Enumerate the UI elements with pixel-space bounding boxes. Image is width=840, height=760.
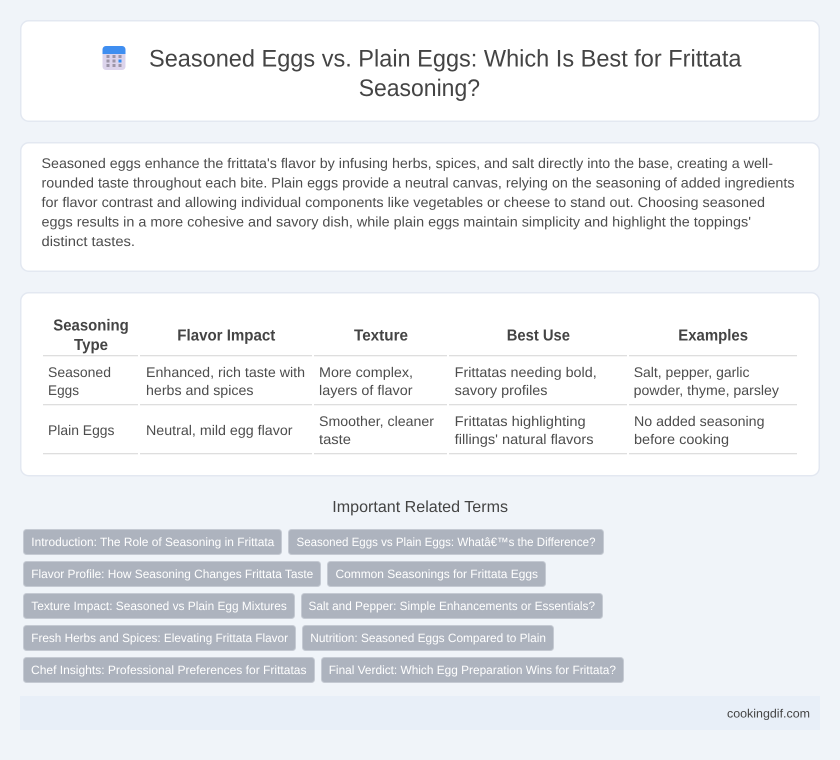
tag: texture impact: Texture Impact: Seasoned vs Plain Egg Mixtures — [31, 599, 287, 613]
tag: flavor profile — [24, 562, 320, 586]
heading: important related terms: Important Related Terms — [332, 499, 508, 516]
table row: seasoned eggs: herbs and spices — [146, 382, 254, 398]
text block: description paragraph: rounded taste throughout each bite. Plain eggs provide a neutral canvas, relying on the seasoning of added ingredients — [42, 174, 794, 190]
table row: plain eggs: taste — [319, 431, 351, 447]
table row: plain eggs: fillings' natural flavors — [455, 431, 594, 447]
tag: nutrition — [302, 626, 554, 650]
table row: plain eggs: No added seasoning — [634, 413, 764, 429]
tag: final verdict: Final Verdict: Which Egg Preparation Wins for Frittata? — [329, 663, 616, 677]
tag: fresh herbs: Fresh Herbs and Spices: Elevating Frittata Flavor — [31, 631, 288, 645]
table header row: Texture — [354, 328, 408, 345]
table header row: Flavor Impact — [177, 328, 276, 345]
table row: plain eggs — [48, 413, 764, 447]
text block: description paragraph: eggs results in a more cohesive and savory dish, while plain eggs maintain simplicity and highlight the toppings' — [42, 214, 751, 230]
tag: flavor profile: Flavor Profile: How Seasoning Changes Frittata Taste — [31, 567, 314, 581]
table row: seasoned eggs: Seasoned — [48, 364, 111, 380]
tag: difference: Seasoned Eggs vs Plain Eggs: Whatâ€™s the Difference? — [296, 535, 596, 549]
tag: salt and pepper: Salt and Pepper: Simple Enhancements or Essentials? — [308, 599, 595, 613]
table row: plain eggs: before cooking — [634, 431, 729, 447]
tag: common seasonings: Common Seasonings for Frittata Eggs — [336, 567, 538, 581]
panel: related term tags — [24, 530, 624, 682]
panel: description — [21, 143, 819, 271]
text block: description paragraph: Seasoned eggs enhance the frittata's flavor by infusing herbs, spices, and salt directly into the base, creating a well- — [42, 155, 773, 171]
tag: introduction — [24, 530, 282, 554]
title: Seasoned Eggs vs. Plain Eggs: Which Is Best for Frittata — [149, 46, 742, 72]
table row: seasoned eggs: Salt, pepper, garlic — [634, 364, 750, 380]
title: Seasoning? — [359, 75, 480, 102]
panel: comparison table — [21, 293, 819, 476]
table row: seasoned eggs — [48, 364, 779, 398]
tag: chef insights: Chef Insights: Professional Preferences for Frittatas — [31, 663, 306, 677]
table row: seasoned eggs: savory profiles — [455, 382, 548, 398]
table row: seasoned eggs: More complex, — [319, 364, 413, 380]
table row: seasoned eggs: Eggs — [48, 382, 79, 398]
table row: seasoned eggs: powder, thyme, parsley — [634, 382, 779, 398]
table row: seasoned eggs: Frittatas needing bold, — [455, 364, 597, 380]
tag: salt and pepper — [302, 594, 602, 618]
table row: plain eggs: Smoother, cleaner — [319, 413, 434, 429]
table row: plain eggs: Neutral, mild egg flavor — [146, 422, 293, 438]
panel: header — [21, 21, 819, 121]
footer bar: cookingdif.com — [727, 706, 810, 720]
table header row — [53, 318, 748, 354]
table header row: Type — [74, 337, 108, 354]
text block: description paragraph: for flavor contrast and allowing individual components like vegetables or cheese to stand out. Choosing seasoned — [42, 194, 765, 210]
tag: difference — [288, 530, 604, 554]
tag: introduction: Introduction: The Role of Seasoning in Frittata — [31, 535, 275, 549]
tag: final verdict — [322, 658, 624, 682]
table row: seasoned eggs: Enhanced, rich taste with — [146, 364, 305, 380]
table row: plain eggs: Plain Eggs — [48, 422, 114, 438]
tag: nutrition: Nutrition: Seasoned Eggs Compared to Plain — [310, 631, 546, 645]
tag: texture impact — [24, 594, 294, 618]
text block: description paragraph — [42, 155, 794, 249]
text block: description paragraph: distinct tastes. — [42, 233, 135, 249]
icon: calendar — [102, 46, 126, 70]
table row: plain eggs: Frittatas highlighting — [455, 413, 586, 429]
title — [149, 46, 742, 102]
table header row: Examples — [678, 328, 748, 345]
table header row: Best Use — [507, 328, 570, 345]
table header row: Seasoning — [53, 318, 129, 335]
table row: seasoned eggs: layers of flavor — [319, 382, 413, 398]
footer bar — [20, 696, 820, 730]
tag: common seasonings — [328, 562, 546, 586]
tag: fresh herbs — [24, 626, 296, 650]
tag: chef insights — [24, 658, 314, 682]
